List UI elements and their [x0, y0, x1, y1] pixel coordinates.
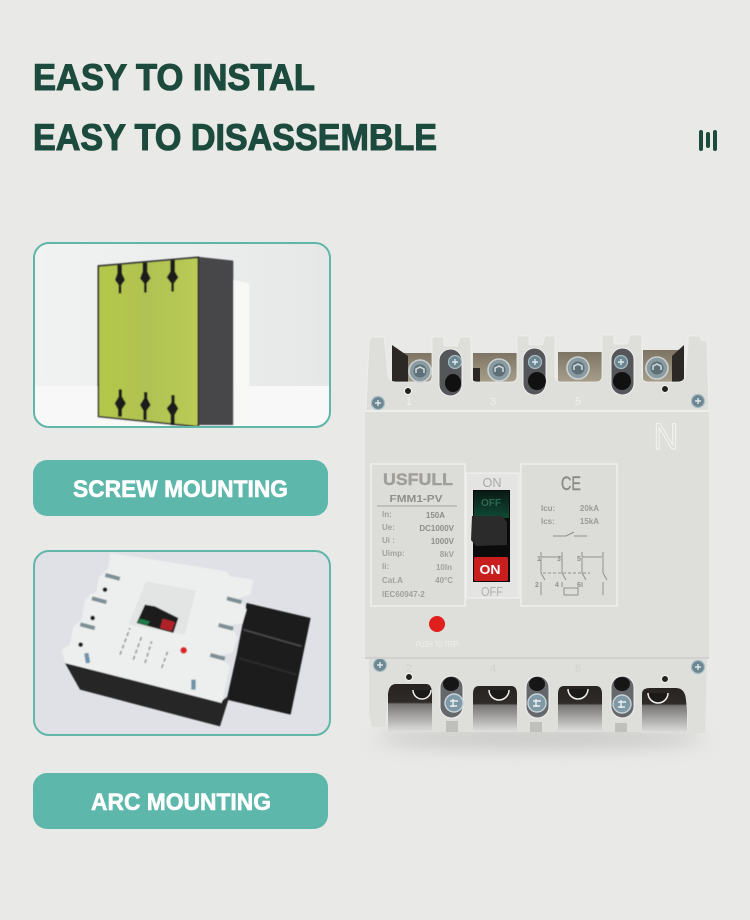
yellow rear face	[98, 257, 198, 427]
bottom pole numbers	[406, 663, 581, 675]
switch assembly: OFF	[481, 498, 501, 509]
white body	[62, 553, 253, 703]
specification panel: 5	[577, 556, 581, 563]
rating label panel: DC1000V	[419, 524, 455, 533]
title line 2: EASY TO DISASSEMBLE	[33, 117, 437, 158]
specification panel: 2	[535, 582, 539, 589]
rating label panel: USFULL	[383, 470, 453, 489]
specification panel	[521, 464, 617, 606]
pole marking N: N	[654, 416, 678, 457]
bottom pole numbers: 4	[490, 663, 496, 675]
panel: arc mounting photo	[34, 551, 330, 735]
rating label panel: In:	[382, 510, 392, 519]
rating label panel: Cat.A	[382, 576, 403, 585]
bottom terminal block	[369, 658, 707, 733]
rating label panel: IEC60947-2	[382, 590, 425, 599]
rating label panel: Ii:	[382, 562, 389, 571]
terminal screws and fins	[80, 573, 242, 661]
black base	[65, 663, 230, 726]
toggle handle	[471, 516, 507, 546]
specification panel: 1	[537, 556, 541, 563]
switch assembly: OFF	[481, 584, 503, 599]
bottom pole numbers: 2	[406, 663, 412, 675]
top pole numbers: 1	[406, 396, 412, 408]
switch symbol	[553, 532, 587, 536]
mounting slots	[115, 260, 178, 425]
top pole numbers: 5	[575, 396, 581, 408]
top pole numbers	[406, 396, 581, 408]
specification panel: 15kA	[580, 517, 599, 526]
specification panel: CE	[561, 474, 581, 495]
trip button	[180, 647, 187, 654]
trip button	[416, 616, 458, 649]
rating label panel: 40°C	[435, 576, 453, 585]
rating label panel	[371, 464, 465, 606]
switch assembly	[466, 473, 519, 599]
rating label panel: 8kV	[440, 550, 455, 559]
drop shadow	[375, 727, 705, 749]
top slots and screws	[372, 348, 704, 410]
button: screw mounting	[33, 460, 328, 516]
specification panel: 4	[555, 582, 559, 589]
bottom pole numbers: 6	[575, 663, 581, 675]
icon: three vertical bars	[699, 130, 717, 151]
specification panel: 6	[577, 582, 581, 589]
label panel	[128, 581, 196, 635]
specification panel: 3	[557, 556, 561, 563]
specification panel: 20kA	[580, 504, 599, 513]
bottom terminal pits	[388, 684, 687, 733]
switch assembly: ON	[482, 475, 502, 490]
printed label text	[120, 628, 168, 668]
top terminal metal plates	[392, 345, 684, 384]
circuit diagram	[541, 552, 607, 595]
switch assembly: ON	[480, 563, 500, 577]
bottom slots, notches and screws	[374, 658, 704, 732]
bottom terminal connectors	[413, 689, 668, 703]
rating label panel: 1000V	[431, 537, 455, 546]
specification panel: Ics:	[541, 517, 555, 526]
dark side of breaker	[197, 257, 233, 425]
red ON indicator	[474, 557, 508, 581]
specification panel: Icu:	[541, 504, 555, 513]
top terminal block	[366, 335, 709, 411]
title line 1: EASY TO INSTAL	[33, 57, 315, 98]
arc chutes	[227, 603, 311, 715]
switch	[137, 605, 178, 633]
rating label panel: 10In	[436, 563, 452, 572]
circuit breaker	[365, 335, 709, 749]
top pole numbers: 3	[490, 396, 496, 408]
trip button: PUSH TO TRIP	[416, 640, 458, 649]
panel: screw mounting photo	[34, 243, 330, 427]
button: arc mounting	[33, 773, 328, 829]
screws	[84, 653, 90, 663]
rating label panel: 150A	[426, 511, 445, 520]
button: arc mounting: ARC MOUNTING	[91, 789, 271, 816]
rating label panel: Uimp:	[382, 549, 405, 558]
title	[33, 57, 437, 158]
rating label panel: Ue:	[382, 523, 395, 532]
rating label panel: Ui :	[382, 536, 395, 545]
main body	[365, 411, 709, 659]
rating label panel: FMM1-PV	[390, 493, 442, 505]
button: screw mounting: SCREW MOUNTING	[73, 476, 288, 503]
white rear case	[93, 280, 249, 425]
